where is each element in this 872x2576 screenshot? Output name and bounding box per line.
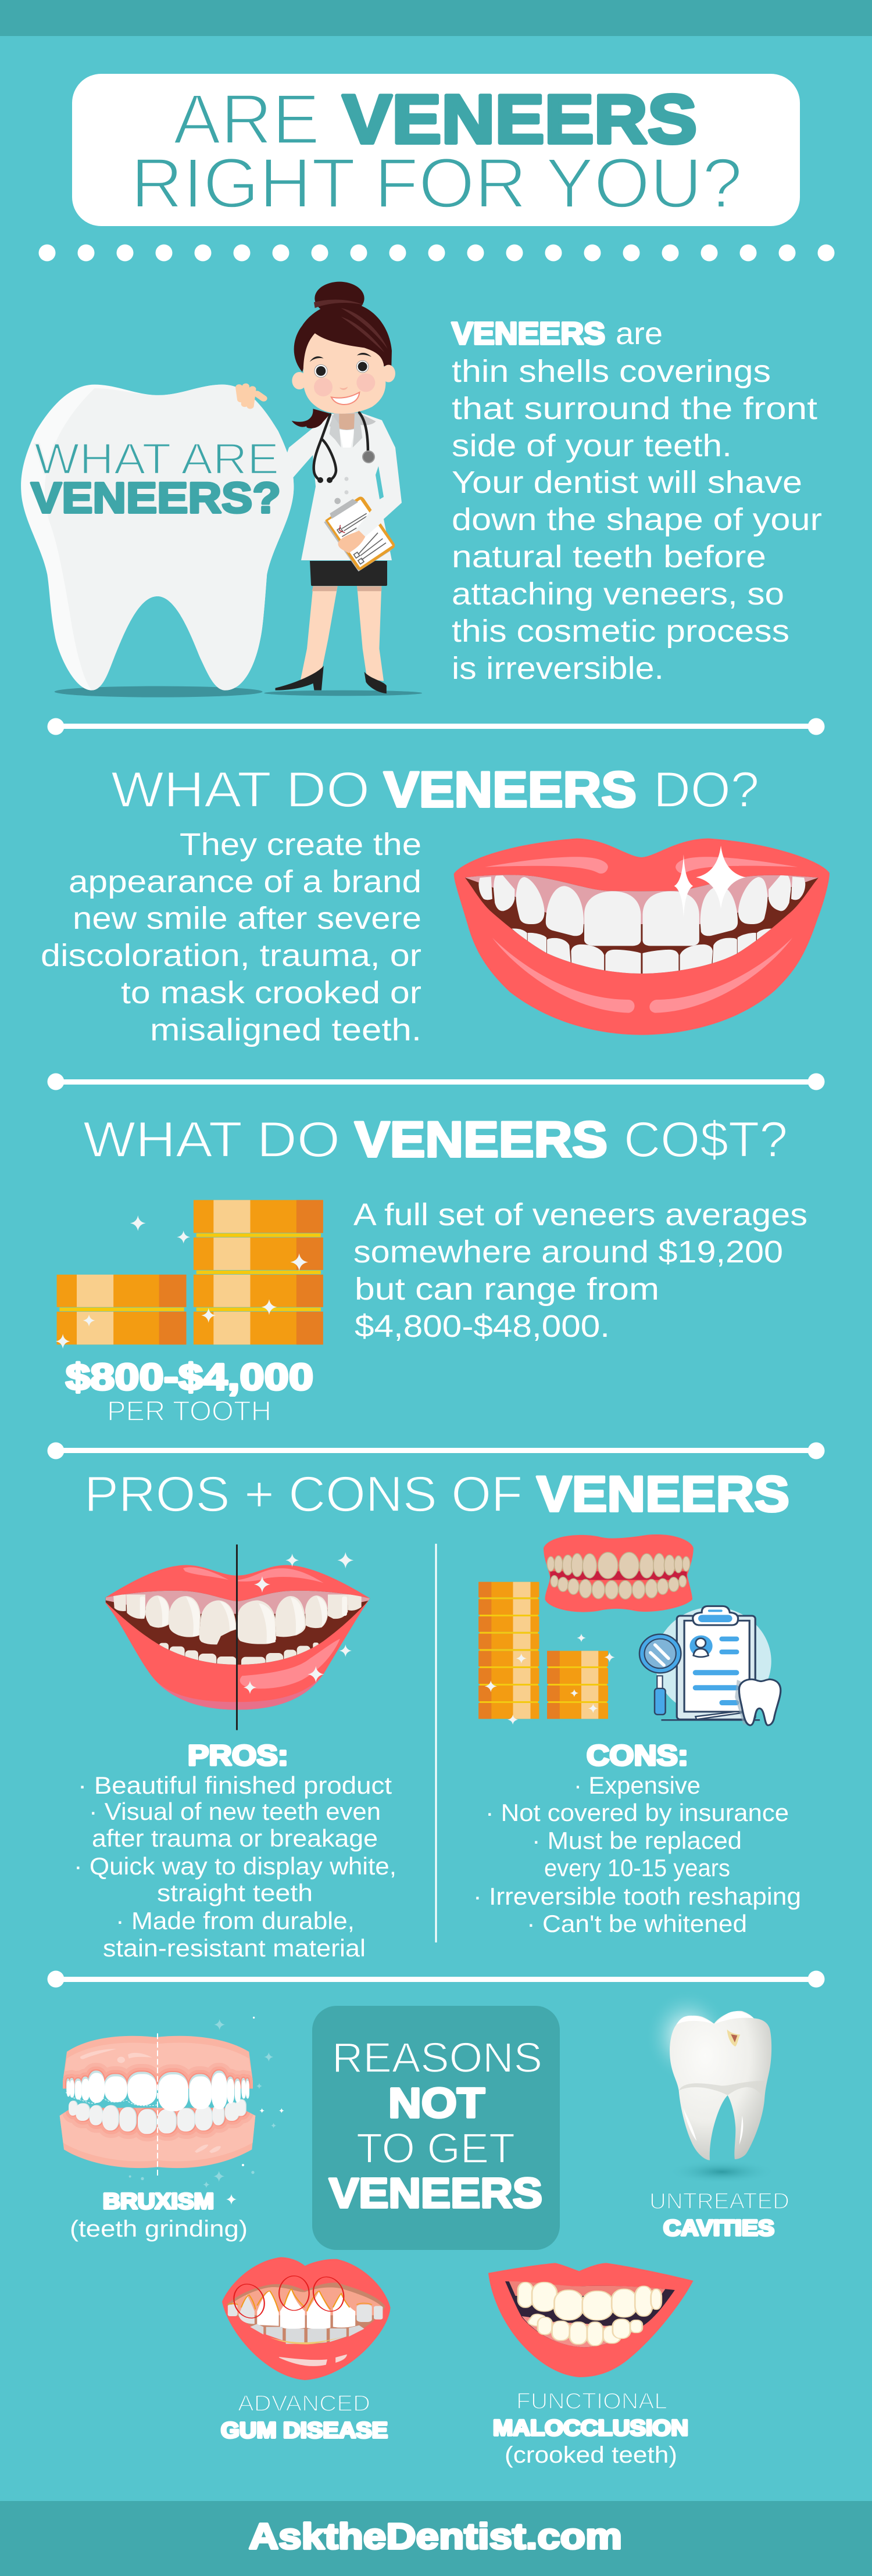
text: definition of veneers: VENEERS (452, 316, 605, 351)
pros text: · Made from durable, (116, 1907, 355, 1934)
malocclusion label: FUNCTIONAL (516, 2389, 667, 2414)
cons text: · Expensive (574, 1772, 701, 1799)
title: ARE (173, 80, 320, 159)
gum disease label: GUM DISEASE (221, 2418, 388, 2443)
heading: VENEERS (384, 762, 637, 818)
cons text: · Not covered by insurance (485, 1799, 789, 1826)
pros text (74, 1740, 396, 1962)
text: definition of veneers: that surround the front (452, 391, 817, 426)
cons text: · Can't be whitened (527, 1910, 747, 1937)
price per tooth (66, 1356, 313, 1427)
panel: what are veneers (21, 282, 822, 697)
pros text: after trauma or breakage (92, 1824, 378, 1852)
title: RIGHT FOR YOU? (131, 144, 742, 223)
malocclusion label (493, 2389, 688, 2468)
sparkle beside bruxism (226, 2194, 237, 2205)
heading: CO$T? (624, 1112, 788, 1168)
gum disease label: ADVANCED (238, 2391, 370, 2416)
cons text (473, 1740, 801, 1937)
icon: dentist character (21, 282, 422, 697)
malocclusion label: MALOCCLUSION (493, 2416, 688, 2441)
heading: WHAT DO (111, 762, 370, 818)
heading: what are veneers: WHAT ARE (34, 434, 279, 483)
gum disease label (221, 2391, 388, 2443)
panel: reasons not to get veneers (60, 1990, 789, 2468)
text: full set price: $4,800-$48,000. (355, 1309, 610, 1344)
icon: malocclusion mouth (488, 2263, 694, 2377)
reasons heading box: VENEERS (329, 2170, 542, 2217)
reasons heading box: NOT (388, 2080, 485, 2127)
cons text: CONS: (587, 1740, 688, 1772)
reasons heading box (312, 2006, 560, 2250)
text: definition of veneers: attaching veneers, so (452, 577, 784, 611)
text: what veneers do: discoloration, trauma, or (41, 938, 421, 973)
clipboard and tooth (639, 1606, 781, 1725)
text: definition of veneers: natural teeth before (452, 539, 766, 574)
clipboard (324, 497, 395, 571)
text: full set price: somewhere around $19,200 (353, 1235, 783, 1269)
coat buttons (344, 477, 349, 494)
heading: WHAT DO (83, 1112, 340, 1168)
text: full set price (353, 1197, 807, 1344)
heading (84, 1466, 789, 1522)
shadows and legs (55, 586, 422, 697)
icon: smiling lips (454, 838, 830, 1035)
icon: cons illustrations (478, 1534, 781, 1725)
head (292, 282, 395, 448)
cons text: · Irreversible tooth reshaping (473, 1883, 801, 1910)
text: full set price: but can range from (355, 1272, 659, 1307)
heading: VENEERS (537, 1466, 789, 1522)
title: VENEERS (342, 81, 697, 158)
heading: VENEERS (355, 1112, 607, 1168)
cavities label (649, 2189, 789, 2241)
text: what veneers do: misaligned teeth. (150, 1012, 421, 1047)
heading: PROS + CONS OF (84, 1466, 523, 1522)
heading: DO? (653, 762, 759, 818)
stained dentures (544, 1534, 694, 1612)
pros text: stain-resistant material (103, 1934, 366, 1962)
title (72, 74, 800, 226)
heading (111, 762, 759, 818)
text: what veneers do: They create the (180, 827, 421, 862)
icon: bruxism jaws (60, 2017, 284, 2188)
coin stacks (478, 1582, 615, 1725)
cavities label: CAVITIES (663, 2216, 774, 2241)
text: definition of veneers: Your dentist will shave (452, 465, 802, 500)
icon: coin stacks (56, 1200, 323, 1349)
bruxism label: BRUXISM (103, 2189, 214, 2214)
panel: what do veneers cost (56, 1112, 807, 1427)
icon: gum disease mouth (222, 2257, 391, 2380)
text: definition of veneers: are (616, 316, 663, 351)
text: definition of veneers: down the shape of your (452, 502, 822, 537)
heading: what are veneers: VENEERS? (31, 474, 281, 522)
text: what veneers do: new smile after severe (73, 901, 421, 936)
cons text: every 10-15 years (544, 1854, 730, 1881)
skirt (310, 561, 387, 586)
footer band (0, 2501, 872, 2576)
tooth with heading (21, 385, 294, 690)
text: definition of veneers: side of your teeth. (452, 428, 732, 463)
text: definition of veneers (452, 316, 822, 686)
cons text: · Must be replaced (532, 1827, 742, 1854)
malocclusion label: (crooked teeth) (505, 2442, 677, 2468)
pros text: PROS: (188, 1740, 288, 1772)
footer band: AsktheDentist.com (249, 2517, 622, 2557)
coat (273, 413, 402, 560)
pros text: · Visual of new teeth even (89, 1798, 381, 1825)
reasons heading box: TO GET (356, 2126, 515, 2172)
reasons heading box: REASONS (332, 2035, 542, 2081)
bruxism label: (teeth grinding) (70, 2216, 248, 2242)
text: definition of veneers: this cosmetic process (452, 614, 789, 649)
price per tooth: $800-$4,000 (66, 1356, 313, 1398)
cavities label: UNTREATED (649, 2189, 789, 2214)
pros text: · Beautiful finished product (78, 1772, 392, 1799)
text: definition of veneers: is irreversible. (452, 651, 664, 686)
panel: what do veneers do (41, 762, 830, 1047)
text: full set price: A full set of veneers averages (353, 1197, 807, 1232)
pros text: · Quick way to display white, (74, 1852, 396, 1880)
text: what veneers do: appearance of a brand (69, 864, 421, 899)
icon: molar with cavity (645, 1990, 776, 2184)
panel: pros and cons (74, 1466, 801, 1962)
stethoscope (314, 413, 374, 483)
heading: what are veneers (31, 434, 281, 522)
heading (83, 1112, 788, 1168)
bruxism label (70, 2189, 248, 2242)
text: what veneers do (41, 827, 421, 1047)
icon: before and after lips (105, 1544, 372, 1730)
pros text: straight teeth (157, 1879, 313, 1906)
text: definition of veneers: thin shells coverings (452, 354, 771, 389)
text: what veneers do: to mask crooked or (121, 975, 421, 1010)
top band (0, 0, 872, 36)
price per tooth: PER TOOTH (107, 1396, 271, 1427)
